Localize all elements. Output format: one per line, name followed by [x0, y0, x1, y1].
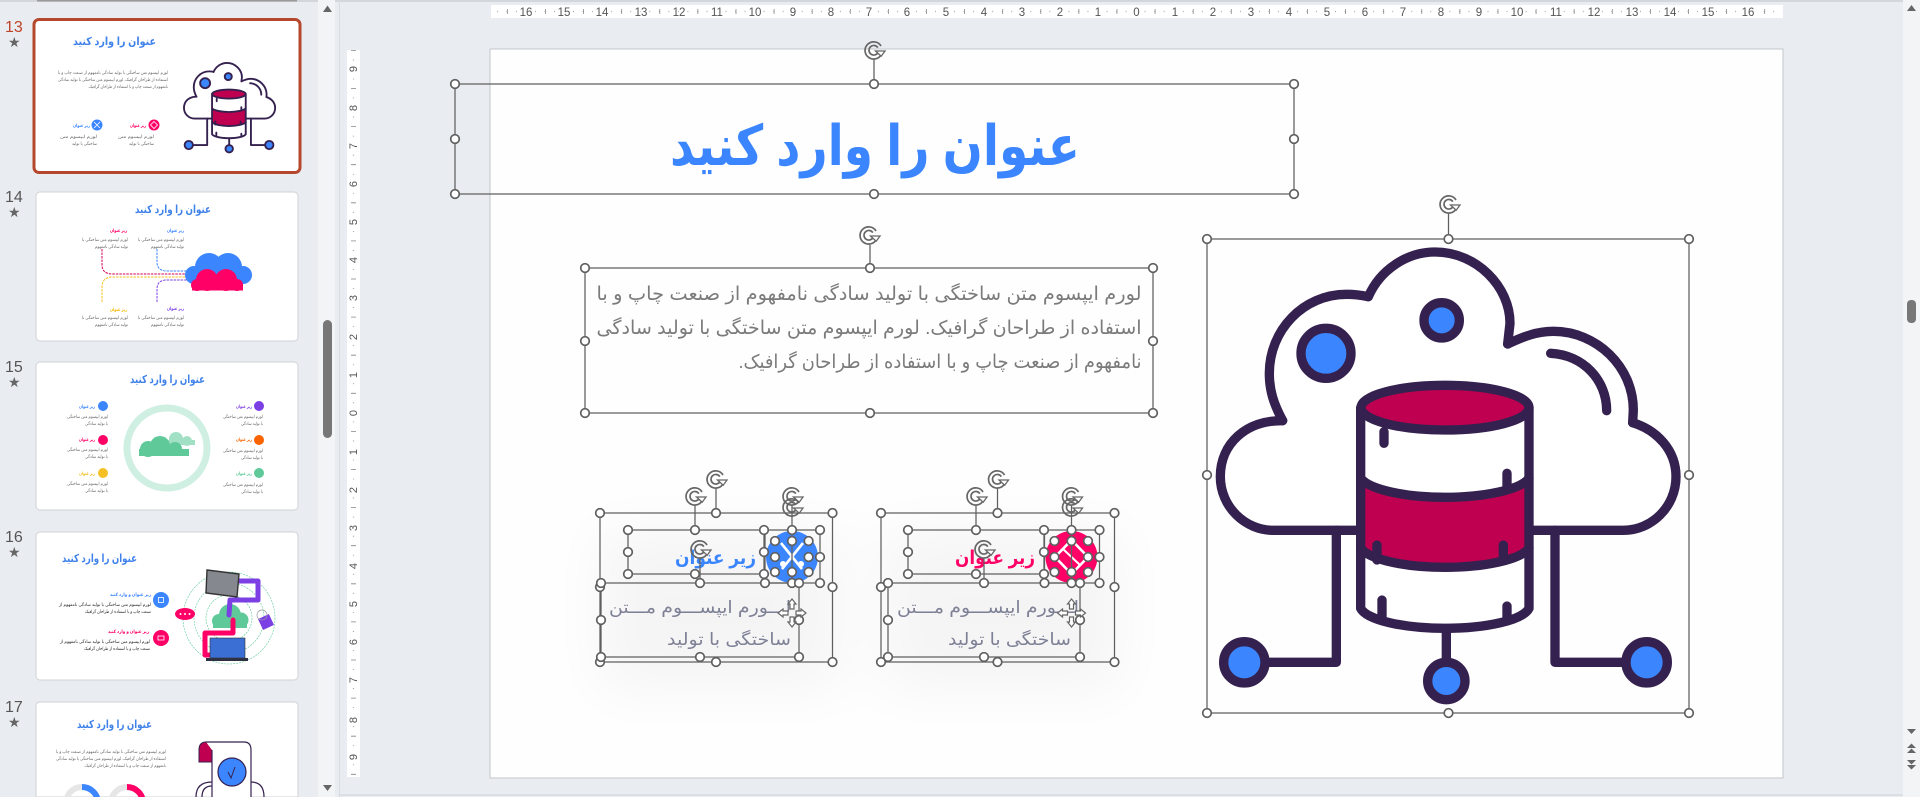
- vertical ruler: 9: [348, 66, 360, 72]
- thumbnail 17: نامفهوم از صنعت چاپ و با استفاده از طراحان گرافیک.: [84, 763, 166, 768]
- vertical ruler: 4: [348, 563, 360, 569]
- horizontal ruler: 11: [711, 7, 723, 19]
- thumbnail 15: لورم ایپسوم متن ساختگی: [67, 414, 108, 419]
- thumbnail 15: زیر عنوان: [79, 471, 95, 476]
- thumbnail 15: زیر عنوان: [79, 437, 95, 442]
- slide number 16: [5, 529, 23, 560]
- thumbnail 14: لورم ایپسوم متن ساختگی با: [82, 237, 128, 242]
- vertical ruler: 7: [348, 143, 360, 149]
- thumbnail 17: استفاده از طراحان گرافیک. لورم ایپسوم متن ساختگی با تولید سادگی: [56, 756, 166, 761]
- horizontal ruler: 15: [1702, 7, 1714, 19]
- vertical ruler: 3: [348, 525, 360, 531]
- horizontal ruler: 7: [866, 7, 872, 19]
- body text block: استفاده از طراحان گرافیک. لورم ایپسوم متن ساختگی با تولید سادگی: [596, 316, 1142, 339]
- thumbnail 14: زیر عنوان: [167, 228, 184, 233]
- thumbnail 14: زیر عنوان: [110, 228, 127, 233]
- thumbnail 14: تولید سادگی نامفهوم: [151, 322, 185, 327]
- thumbnail 13: ساختگی با تولید: [129, 141, 154, 146]
- slide number 16: 16: [5, 529, 23, 546]
- thumbnail 15: لورم ایپسوم متن ساختگی: [223, 482, 263, 487]
- vertical ruler: 5: [348, 601, 360, 607]
- thumbnail 15: لورم ایپسوم متن ساختگی: [67, 447, 108, 452]
- thumbnail 13: [34, 20, 300, 172]
- vertical ruler: 7: [348, 677, 360, 683]
- thumbnail 13: عنوان را وارد کنید: [73, 36, 156, 48]
- top edge bar: [0, 0, 1920, 2]
- horizontal ruler: 10: [1511, 7, 1523, 19]
- thumbnail 14: لورم ایپسوم متن ساختگی با: [138, 315, 184, 320]
- thumbnail 15: با تولید سادگی: [241, 489, 263, 494]
- horizontal ruler: 14: [1664, 7, 1677, 19]
- thumbnail 14: تولید سادگی نامفهوم: [151, 244, 185, 249]
- icon: pink diamond: [1046, 531, 1098, 583]
- thumbnail 15: با تولید سادگی: [85, 454, 108, 459]
- vertical ruler: 2: [348, 334, 360, 340]
- panel: slide thumbnails: [5, 0, 340, 797]
- icon: blue scissors: [766, 531, 818, 583]
- horizontal ruler: 16: [520, 7, 532, 19]
- vertical ruler: 2: [348, 487, 360, 493]
- horizontal ruler: 0: [1133, 7, 1140, 19]
- body text block: لورم ایپسوم متن ساختگی با تولید سادگی نامفهوم از صنعت چاپ و با: [596, 282, 1142, 305]
- soft shadow behind sub-items: [600, 530, 1120, 690]
- vertical ruler: 1: [348, 449, 360, 455]
- body text block: نامفهوم از صنعت چاپ و با استفاده از طراحان گرافیک.: [738, 350, 1142, 373]
- thumbnail 15: با تولید سادگی: [85, 421, 108, 426]
- slide number 16: ★: [8, 544, 21, 560]
- thumbnail 17: عنوان را وارد کنید: [77, 719, 152, 731]
- thumbnail 14: عنوان را وارد کنید: [135, 204, 211, 216]
- title: عنوان را وارد کنید: [670, 114, 1080, 179]
- sub-item: pink: [877, 471, 1119, 666]
- vertical ruler: 1: [348, 372, 360, 378]
- vertical ruler: 6: [348, 639, 360, 645]
- thumbnail 13: استفاده از طراحان گرافیک. لورم ایپسوم متن ساختگی با تولید سادگی: [58, 77, 168, 82]
- thumbnail 15: با تولید سادگی: [241, 455, 263, 460]
- horizontal ruler: 4: [1286, 7, 1293, 19]
- horizontal ruler: 11: [1550, 7, 1562, 19]
- slide number 17: ★: [8, 714, 21, 730]
- selection handles: [877, 471, 1119, 666]
- horizontal ruler: 13: [1626, 7, 1638, 19]
- slide number 17: [5, 699, 23, 730]
- bottom edge line: [340, 794, 1920, 796]
- thumbnail 13: زیر عنوان: [130, 123, 146, 128]
- thumbnail 14: لورم ایپسوم متن ساختگی با: [82, 315, 128, 320]
- horizontal ruler: 14: [596, 7, 609, 19]
- horizontal ruler: 2: [1210, 7, 1216, 19]
- horizontal ruler: 1: [1095, 7, 1101, 19]
- thumbnail 13: لورم ایپسوم متن: [118, 134, 154, 139]
- vertical ruler: 5: [348, 219, 360, 225]
- thumbnail 14: [36, 192, 298, 341]
- thumbnail scrollbar: [318, 0, 340, 797]
- slide number 13: ★: [8, 34, 21, 50]
- thumbnail 15: زیر عنوان: [79, 404, 95, 409]
- thumbnail 17: لورم ایپسوم متن ساختگی با تولید سادگی نامفهوم از صنعت چاپ و با: [56, 749, 166, 754]
- thumbnail 13: زیر عنوان: [73, 123, 90, 128]
- vertical ruler: 8: [348, 717, 360, 723]
- thumbnail 16: [36, 532, 298, 680]
- horizontal ruler: 6: [1362, 7, 1368, 19]
- horizontal ruler: 6: [904, 7, 910, 19]
- horizontal ruler: 5: [1324, 7, 1330, 19]
- thumbnail 16: لورم ایپسوم متن ساختگی با تولید سادگی نامفهوم از: [58, 602, 151, 607]
- horizontal ruler: 16: [1742, 7, 1754, 19]
- thumbnail 14: زیر عنوان: [110, 307, 127, 312]
- description text: [609, 598, 791, 649]
- vertical ruler: 6: [348, 181, 360, 187]
- illustration selection frame: [1203, 196, 1693, 717]
- thumbnail 15: با تولید سادگی: [85, 488, 108, 493]
- thumbnail 15: زیر عنوان: [236, 437, 252, 442]
- description text: [897, 598, 1079, 649]
- thumbnail 14: لورم ایپسوم متن ساختگی با: [138, 237, 184, 242]
- slide number 13: 13: [5, 19, 23, 36]
- thumbnail 15: لورم ایپسوم متن ساختگی: [223, 414, 263, 419]
- horizontal ruler: 8: [1438, 7, 1444, 19]
- body text block: [581, 227, 1157, 417]
- horizontal ruler: 7: [1400, 7, 1406, 19]
- horizontal ruler: 4: [981, 7, 988, 19]
- thumbnail 13: لورم ایپسوم متن: [60, 134, 97, 139]
- thumbnail 17: [36, 702, 298, 797]
- horizontal ruler: 3: [1248, 7, 1254, 19]
- horizontal ruler: 13: [635, 7, 647, 19]
- horizontal ruler: 12: [673, 7, 685, 19]
- horizontal ruler: 8: [828, 7, 834, 19]
- thumbnail 15: [36, 362, 298, 510]
- thumbnail 13: نامفهوم از صنعت چاپ و با استفاده از طراحان گرافیک.: [88, 84, 168, 89]
- thumbnail 13: لورم ایپسوم متن ساختگی با تولید سادگی نامفهوم از صنعت چاپ و با: [58, 70, 168, 75]
- description text: لـــورم ایپســـوم مـــتن: [897, 598, 1079, 618]
- title selection frame: [451, 42, 1298, 198]
- vertical ruler: 3: [348, 295, 360, 301]
- thumbnail 15: با تولید سادگی: [241, 421, 263, 426]
- horizontal ruler: 2: [1057, 7, 1063, 19]
- thumbnail 16: صنعت چاپ و با استفاده از طراحان گرافیک: [84, 646, 150, 651]
- horizontal ruler: 12: [1588, 7, 1600, 19]
- thumbnail 14: تولید سادگی نامفهوم: [95, 322, 129, 327]
- description text: ساختگی با تولید: [667, 629, 791, 649]
- sub-item: blue: [596, 471, 837, 666]
- thumbnail 14: زیر عنوان: [167, 306, 184, 311]
- thumbnail 15: عنوان را وارد کنید: [130, 374, 205, 386]
- illustration: cloud database: [1203, 196, 1693, 717]
- thumbnail 15: لورم ایپسوم متن ساختگی: [223, 448, 263, 453]
- thumbnail 13: ساختگی با تولید: [72, 141, 97, 146]
- thumbnail 16: صنعت چاپ و با استفاده از طراحان گرافیک: [85, 609, 151, 614]
- vertical ruler: 8: [348, 105, 360, 111]
- slide number 15: ★: [8, 374, 21, 390]
- thumbnail 14: تولید سادگی نامفهوم: [95, 244, 129, 249]
- selection handles: [596, 471, 837, 666]
- horizontal ruler: 3: [1019, 7, 1025, 19]
- vertical ruler: 9: [348, 754, 360, 760]
- thumbnail 16: عنوان را وارد کنید: [62, 553, 137, 565]
- thumbnail 15: زیر عنوان: [236, 404, 252, 409]
- thumbnail 15: لورم ایپسوم متن ساختگی: [67, 481, 108, 486]
- horizontal ruler: 10: [749, 7, 761, 19]
- horizontal ruler: 15: [558, 7, 570, 19]
- horizontal ruler: [491, 5, 1783, 19]
- slide number 15: [5, 359, 23, 390]
- slide number 15: 15: [5, 359, 23, 376]
- right scrollbar: [1903, 0, 1920, 797]
- vertical ruler: 0: [348, 410, 360, 416]
- vertical ruler: [347, 50, 360, 777]
- thumbnail 16: زیر عنوان و وارد کنید: [110, 592, 151, 597]
- subtitle: زیر عنوان: [675, 548, 756, 569]
- slide number 14: ★: [8, 204, 21, 220]
- description text: ساختگی با تولید: [948, 629, 1071, 649]
- description text: لـــورم ایپســـوم مـــتن: [609, 598, 791, 618]
- slide number 14: 14: [5, 189, 23, 206]
- horizontal ruler: 9: [1476, 7, 1482, 19]
- horizontal ruler: 1: [1172, 7, 1178, 19]
- thumbnail 16: لورم ایپسوم متن ساختگی با تولید سادگی نامفهوم از: [59, 639, 150, 644]
- slide number 13: [5, 19, 23, 50]
- thumbnail 16: زیر عنوان و وارد کنید: [108, 629, 149, 634]
- slide number 17: 17: [5, 699, 23, 716]
- vertical ruler: 4: [348, 257, 360, 263]
- horizontal ruler: 9: [790, 7, 796, 19]
- horizontal ruler: 5: [943, 7, 949, 19]
- subtitle: زیر عنوان: [955, 548, 1035, 569]
- slide number 14: [5, 189, 23, 220]
- panel: main slide: [490, 49, 1783, 778]
- thumbnail 15: زیر عنوان: [236, 471, 252, 476]
